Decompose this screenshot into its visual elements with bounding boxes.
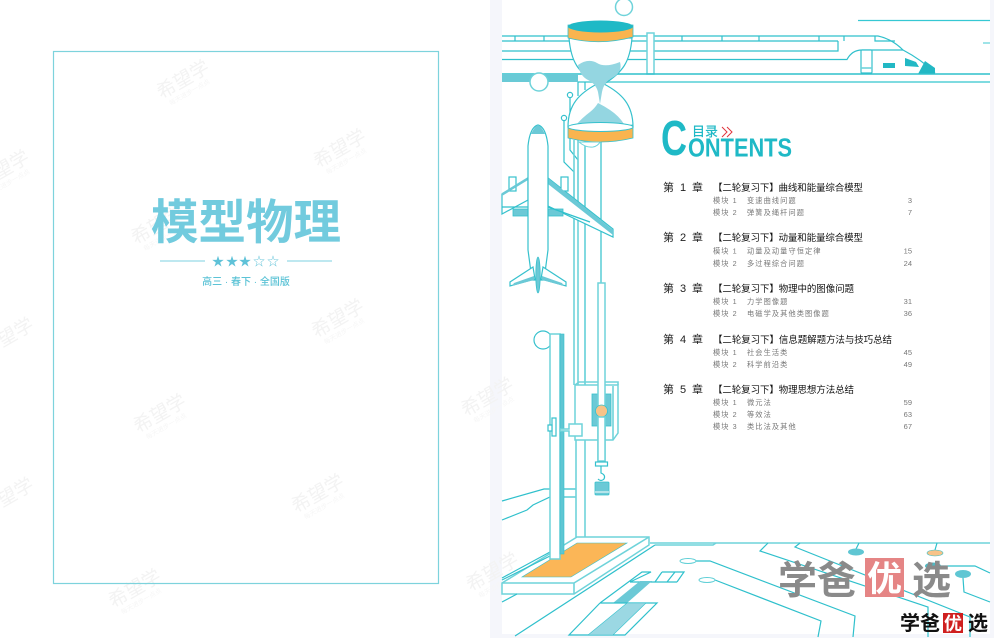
heading: contents: 目录 [692,124,718,139]
fuselage [528,125,548,280]
cover subtitle: 高三 · 春下 · 全国版 [202,275,290,288]
watermarks: 希望学 [127,202,188,249]
chapter 5: 5 [680,384,686,396]
star rating: ★ [212,254,224,268]
heading: contents: C [661,112,687,166]
watermarks: 每天进步一点点 [322,315,366,346]
logo: small: 优 [944,614,962,634]
chapter 3: 章 [692,281,703,295]
heading: contents: ONTENTS [688,132,792,162]
chapter 4: 45 [904,348,912,357]
tail [510,267,566,286]
chapter 2: 多过程综合问题 [747,259,805,268]
watermarks: 希望学 [308,295,368,343]
cover title: 模型物理 [151,197,341,250]
top cap [568,25,633,42]
illustration: tall post with clamp [534,331,582,559]
chapter 5: 模块 1 [713,398,738,407]
chapter 4: 社会生活类 [747,348,788,357]
rod [598,283,605,461]
chapter 5: 模块 3 [713,422,738,431]
chapter 2: 2 [680,232,686,244]
logo: large watermark: 优 [867,560,902,599]
illustration: train and track lines [502,0,990,91]
chapter 3: 力学图像题 [747,297,788,306]
chapter 1: 【二轮复习下】曲线和能量综合模型 [713,182,863,194]
upper sand [578,61,621,104]
panel: cover frame [54,52,438,584]
table of contents [663,180,912,431]
logo: small [900,612,988,635]
chapter 5: 59 [904,398,912,407]
watermarks: 每天进步一点点 [142,222,186,253]
chapter 4: 科学前沿类 [747,360,788,369]
chapter 5 [663,382,912,431]
chapter 3: 【二轮复习下】物理中的图像问题 [713,283,854,295]
chapter 5: 章 [692,382,703,396]
chapter 2: 24 [904,259,912,268]
chapter 5: 类比法及其他 [747,422,797,431]
chapter 1: 7 [908,208,912,217]
watermarks: 每天进步一点点 [472,394,516,425]
watermarks: 每天进步一点点 [477,569,521,600]
star rating [160,254,332,268]
chapter 4: 49 [904,360,912,369]
chapter 1: 弹簧及绳杆问题 [747,208,805,217]
chapter 1: 模块 2 [713,208,738,217]
watermarks: 希望学 [130,390,190,438]
lower sand [576,103,624,128]
watermarks: 希望学 [457,374,518,421]
watermarks: 希望学 [105,565,165,613]
chapter 4 [663,332,912,369]
chapter 2: 模块 2 [713,259,738,268]
chapter 2: 模块 1 [713,246,738,256]
watermarks: 希望学 [462,549,523,596]
watermarks: 希望学 [288,470,348,518]
chapter 1: 3 [908,196,912,205]
watermarks: 每天进步一点点 [324,145,368,176]
chapter 5: 【二轮复习下】物理思想方法总结 [713,384,854,396]
clamp box [575,385,618,440]
chapter 4: 【二轮复习下】信息题解题方法与技巧总结 [713,334,892,346]
chapter 3 [663,281,912,318]
chapter 2: 第 [663,230,674,244]
chapter 5: 67 [904,422,912,431]
chapter 3: 电磁学及其他类图像题 [747,309,830,318]
chapter 5: 第 [663,382,674,396]
chapter 4: 模块 1 [713,348,738,357]
chapter 3: 第 [663,281,674,295]
chapter 5: 等效法 [747,410,772,419]
watermarks [0,56,526,619]
circuit traces [696,561,855,637]
chapter 1: 1 [680,182,686,194]
chapter 4: 4 [680,334,686,346]
heading: contents [661,112,792,166]
illustration: stand column [574,140,601,385]
chapter 5: 模块 2 [713,410,738,419]
chapter 3: 模块 1 [713,297,738,306]
chapter 4: 第 [663,332,674,346]
illustration: circuit traces [561,82,585,230]
chapter 3: 36 [904,309,912,318]
chapter 1: 模块 1 [713,196,738,205]
bottom cap [568,125,633,142]
chapter 2: 【二轮复习下】动量和能量综合模型 [713,232,863,244]
chapter 1 [663,180,912,217]
chapter 2 [663,230,912,268]
illustration: lab stand with spring scale [575,283,618,495]
watermarks: 每天进步一点点 [302,490,346,521]
watermarks: 每天进步一点点 [144,410,188,441]
chapter 1: 章 [692,180,703,194]
chapter 5: 微元法 [747,398,772,407]
star rating: ☆ [253,254,265,268]
logo: large watermark: 选 [912,560,951,603]
logo: small: 学爸 [900,612,940,635]
chapter 2: 动量及动量守恒定律 [747,246,822,256]
chapter 2: 章 [692,230,703,244]
chapter 4: 模块 2 [713,360,738,369]
icon: hourglass [568,20,633,147]
star rating: ★ [239,254,251,268]
wings [502,177,613,237]
icon: airplane [502,125,613,293]
watermarks: 每天进步一点点 [167,76,212,107]
logo: large watermark [778,558,951,603]
weight [595,482,609,495]
chapter 1: 第 [663,180,674,194]
watermarks: 每天进步一点点 [119,585,163,616]
chapter 1: 变速曲线问题 [747,196,797,205]
chapter 3: 模块 2 [713,309,738,318]
logo: small: 选 [968,612,988,635]
chapter 5: 63 [904,410,912,419]
logo: large watermark: 学爸 [778,560,856,603]
watermarks: 希望学 [310,125,370,173]
floor tiles [569,572,684,635]
chapter 4: 章 [692,332,703,346]
chapter 2: 15 [904,246,912,256]
watermarks: 希望学 [153,56,213,104]
star rating: ☆ [267,254,279,268]
star rating: ★ [226,254,238,268]
illustration: base platform [502,440,649,594]
chapter 3: 3 [680,283,686,295]
chapter 3: 31 [904,297,912,306]
illustration: floor and circuit lines [502,543,990,637]
